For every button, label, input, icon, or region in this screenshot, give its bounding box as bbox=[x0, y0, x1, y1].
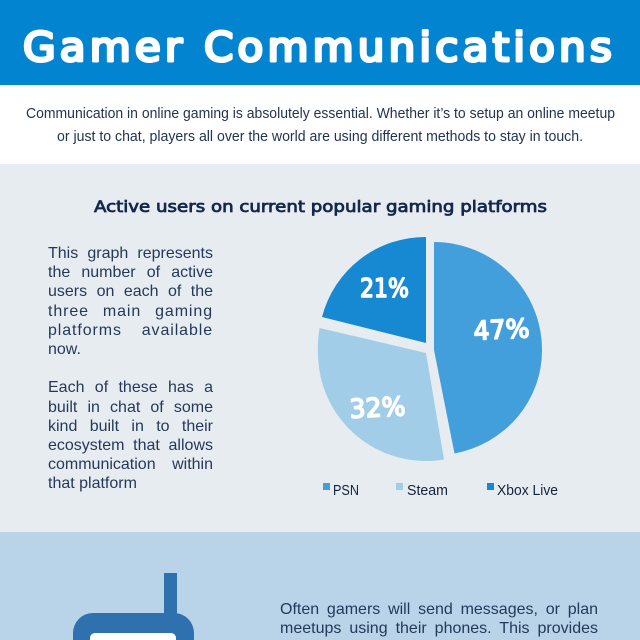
panel: phone messaging bbox=[0, 532, 640, 640]
label: 32%: 32% bbox=[349, 392, 406, 425]
text block: graph description bbox=[48, 245, 214, 492]
text block: graph description: users on each of the bbox=[48, 283, 213, 300]
text block: graph description: kind built in to their bbox=[48, 418, 213, 435]
text block: graph description: Each of these has a bbox=[48, 379, 213, 396]
slice: PSN 47% bbox=[434, 242, 542, 454]
label: 21%: 21% bbox=[360, 274, 409, 304]
legend bbox=[323, 483, 558, 499]
legend: Xbox Live bbox=[497, 483, 558, 499]
pie chart bbox=[318, 237, 542, 461]
text block: graph description: three main gaming bbox=[48, 303, 213, 320]
text block: phone messages: meetups using their phones. This provides bbox=[280, 620, 598, 637]
icon: phone bbox=[73, 573, 194, 640]
text block: graph description: communication within bbox=[48, 456, 213, 473]
text block: graph description: the number of active bbox=[48, 264, 213, 281]
intro text: or just to chat, players all over the world are using different methods to stay in touch. bbox=[57, 128, 583, 145]
intro text bbox=[26, 105, 615, 145]
title banner bbox=[0, 0, 640, 85]
title: Gamer Communications bbox=[23, 25, 616, 71]
text block: graph description: platforms available bbox=[48, 322, 213, 339]
panel: active users bbox=[0, 164, 640, 532]
legend: PSN bbox=[333, 483, 359, 499]
text block: phone messages bbox=[280, 601, 598, 637]
slice: Xbox Live 21% bbox=[322, 237, 426, 343]
chart heading: Active users on current popular gaming platforms bbox=[94, 197, 547, 216]
text block: graph description: built in chat of some bbox=[48, 398, 213, 416]
text block: graph description: that platform bbox=[48, 475, 137, 492]
intro text: Communication in online gaming is absolutely essential. Whether it’s to setup an online meetup bbox=[26, 105, 615, 122]
text block: graph description: ecosystem that allows bbox=[48, 437, 213, 454]
text block: graph description: now. bbox=[48, 341, 81, 358]
text block: graph description: This graph represents bbox=[48, 245, 213, 262]
legend: Steam bbox=[407, 483, 448, 499]
text block: phone messages: Often gamers will send messages, or plan bbox=[280, 601, 598, 618]
slice: Steam 32% bbox=[318, 328, 444, 461]
label: 47%: 47% bbox=[473, 314, 530, 347]
